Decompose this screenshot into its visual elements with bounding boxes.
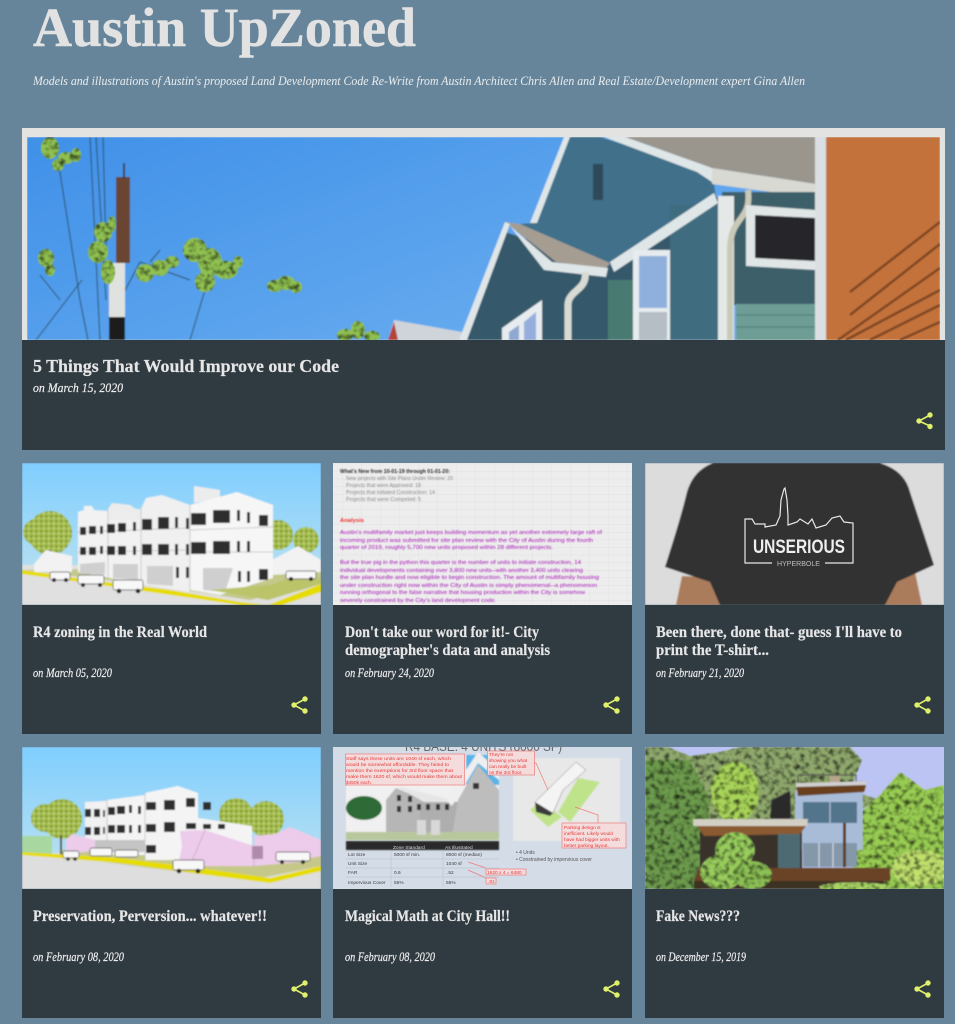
annotation box: staff note: make them 1620 sf, which would make them about (346, 774, 463, 780)
annotation box: parking: Parking design is (564, 825, 601, 831)
image: demographer spreadsheet: the site plan hurdle and now eligible to begin construction. The amount of multifamily housing (340, 575, 599, 581)
table text: 1040 sf (446, 861, 462, 867)
table text: Lot Size (348, 852, 366, 858)
annotation box: staff note (346, 754, 464, 786)
arms (676, 576, 720, 605)
upper overhang (796, 781, 866, 796)
white corner band (815, 137, 828, 340)
image: demographer spreadsheet: incoming product was submitted for site plan review with the City of Austin during the fourth (340, 538, 593, 544)
leaves (38, 137, 380, 341)
table text: 55% (446, 880, 456, 886)
table text: 0.6 (394, 870, 401, 876)
image: demographer spreadsheet: quarter of 2019, roughly 5,700 new units proposed within 28 different projects. (340, 545, 553, 551)
card text panel (22, 605, 321, 734)
annotation box: parking: have had bigger units with (564, 837, 620, 843)
image: annotated zoning slide (333, 738, 632, 889)
trees (22, 519, 34, 544)
gable vent (593, 164, 603, 200)
table text: .52 (447, 870, 454, 876)
deck (694, 868, 890, 881)
annotation box: third floor (488, 751, 534, 776)
site lot (530, 800, 562, 827)
post title: Preservation, Perversion... whatever!! (33, 908, 267, 925)
house upper block (795, 790, 863, 850)
garages (80, 562, 233, 592)
building (85, 799, 145, 850)
dark upper right wall (722, 192, 816, 305)
annotation box: staff note: $450k each. (346, 780, 372, 786)
right window (746, 205, 816, 270)
annotation box: staff note: mention the exemptions for 3rd floor space that (346, 768, 454, 774)
cars (63, 848, 310, 870)
image: pink house model (22, 747, 321, 889)
post date: on February 08, 2020 (345, 950, 436, 964)
featured text panel (22, 340, 945, 450)
isometric building (535, 762, 586, 813)
card text panel (22, 889, 321, 1018)
annotation: math (486, 869, 526, 885)
card text panel (333, 889, 632, 1018)
shirt logo: UNSERIOUS (753, 537, 845, 558)
image: R4 zoning model (22, 463, 321, 605)
image: demographer spreadsheet (333, 463, 632, 605)
orange wall (826, 137, 940, 340)
main gable trim (530, 137, 570, 223)
post title: print the T-shirt... (656, 642, 769, 659)
annotation box: third floor: showing you what (489, 758, 528, 764)
ground (22, 565, 321, 605)
plan panel (513, 758, 620, 841)
image: demographer spreadsheet: Analysis (340, 518, 364, 524)
upper windows (803, 802, 857, 823)
annotation box: staff note: Staff says these units are 1040 sf each, which (346, 756, 451, 762)
post title: Magical Math at City Hall!! (345, 908, 510, 925)
card text panel (333, 605, 632, 734)
downspout lower (568, 272, 585, 340)
image: demographer spreadsheet: severely constrained by the City's land development code. (340, 598, 496, 604)
downspout upper (730, 190, 748, 340)
siding green panel (608, 280, 634, 340)
panel: T-shirt card (645, 463, 944, 734)
table text: Impervious Cover (348, 880, 386, 886)
image: demographer spreadsheet: What's New from 10-01-19 through 01-01-20: (340, 469, 450, 475)
featured post date: on March 15, 2020 (33, 381, 124, 395)
upper gable wall (520, 137, 716, 267)
post title: Been there, done that- guess I'll have to (656, 624, 902, 641)
shirt logo: HYPERBOLE (777, 559, 820, 568)
image: demographer spreadsheet: under construction right now within the City of Austin is simply phenomenal--a phenomenon (340, 583, 597, 589)
porch (700, 827, 802, 871)
annotation box: parking (562, 823, 626, 849)
post title (656, 624, 902, 659)
utility pole (116, 177, 130, 263)
annotation: math: .81 (488, 879, 495, 885)
panel: magical math card (333, 738, 632, 1018)
table text: 5000 sf min. (394, 852, 420, 858)
table text: FAR (348, 870, 358, 876)
table header (346, 841, 499, 850)
windows (80, 510, 268, 582)
post date: on March 05, 2020 (33, 666, 113, 680)
annotation box: staff note: would be somewhat affordable. They failed to (346, 762, 449, 768)
annotation box: third floor: They're not (489, 752, 514, 758)
featured image frame (22, 128, 945, 340)
yellow curb and lawn (22, 570, 321, 605)
spiral stair (770, 791, 791, 820)
icon: share (915, 697, 930, 713)
image: demographer spreadsheet: Projects that initiated Construction: 14 (346, 490, 435, 496)
image: demographer spreadsheet: But the true pig in the python this quarter is the number of units to initiate construction, 14 (340, 560, 581, 566)
windows (85, 798, 225, 853)
fascia and gutter (710, 167, 816, 194)
icon: share (292, 697, 307, 713)
image: demographer spreadsheet: Austin's multifamily market just keeps building momentum as yet another extremely large raft of (340, 530, 602, 536)
annotation box: parking: better parking layout. (564, 843, 609, 849)
building (78, 506, 141, 584)
table text: Zone Standard (393, 845, 425, 851)
image: demographer spreadsheet: New projects with Site Plans Under Review: 20 (346, 476, 453, 482)
post date: on December 15, 2019 (656, 950, 747, 964)
icon: share (604, 981, 619, 997)
table text: 55% (394, 880, 404, 886)
card text panel (645, 605, 944, 734)
icon: share (915, 981, 930, 997)
blog subtitle: Models and illustrations of Austin's proposed Land Development Code Re-Write from Austin Architect Chris Allen and Real Estate/Development expert Gina Allen (32, 73, 805, 88)
post title (345, 624, 550, 659)
pink houses (66, 827, 321, 866)
card text panel (645, 889, 944, 1018)
tall window (633, 250, 670, 340)
image: modern house in trees (645, 747, 948, 892)
panel: featured post (22, 128, 945, 450)
image: demographer spreadsheet: individual developments containing over 3,800 new units--with another 3,400 units clearing (340, 568, 583, 574)
featured post title: 5 Things That Would Improve our Code (33, 356, 339, 376)
trees (31, 804, 59, 832)
icon: share (604, 697, 619, 713)
table text (348, 845, 482, 886)
bullet notes: • 4 Units (516, 850, 535, 856)
table text: As Illustrated (445, 845, 473, 851)
panel: R4 zoning card (22, 463, 321, 734)
lower wall (462, 197, 722, 340)
table text: 8000 sf (median) (446, 852, 482, 858)
table text: Unit Size (348, 861, 368, 867)
post title: Fake News??? (656, 908, 740, 925)
panel: city demographer card (333, 463, 632, 734)
image: demographer spreadsheet: running orthogonal to the false narrative that housing production within the City is somehow (340, 590, 586, 596)
post date: on February 21, 2020 (656, 666, 745, 680)
cars (50, 571, 316, 590)
small gable shingles (505, 222, 610, 270)
image: demographer spreadsheet: Projects that were Approved: 18 (346, 483, 421, 489)
post date: on February 08, 2020 (33, 950, 125, 964)
post title: Don't take our word for it!- City (345, 624, 539, 641)
diagonal trim (610, 193, 718, 272)
corner board (718, 196, 734, 340)
wires and branches (36, 137, 205, 340)
bullet notes (516, 850, 592, 863)
panel: preservation card (22, 747, 321, 1018)
panel: fake news card (645, 747, 948, 1018)
foreground foliage (645, 832, 948, 892)
post title: demographer's data and analysis (345, 642, 550, 659)
ground (22, 853, 321, 889)
yellow curb (22, 852, 321, 883)
shirt (665, 463, 934, 605)
annotation box: parking: inefficient. Likely would (564, 831, 613, 837)
annotation box: third floor: on the 3rd floor. (489, 770, 522, 776)
small gable window (502, 300, 542, 340)
background foliage (645, 747, 944, 889)
annotation box: third floor: can really be built (489, 764, 527, 770)
upper roof shingles (625, 137, 816, 184)
neighbor houses (34, 550, 72, 572)
bullet notes: • Constrained by impervious cover (516, 857, 592, 863)
lower windows (803, 843, 857, 867)
slide title: R4 BASE: 4 UNITS (8000 SF) (405, 738, 562, 754)
light siding (736, 304, 820, 340)
icon: share (292, 981, 307, 997)
icon: share (917, 413, 932, 429)
teal wall band (670, 205, 720, 340)
image: demographer spreadsheet: Projects that were Competed: 5 (346, 497, 421, 503)
rooftop rail (798, 775, 856, 784)
annotation: math: 1620 x 4 = 6480 (487, 870, 522, 876)
shirt logo (745, 488, 853, 568)
background roof (388, 320, 462, 340)
garages (85, 840, 145, 852)
post title: R4 zoning in the Real World (33, 624, 207, 641)
rendering (346, 755, 499, 840)
featured photo: houses and sky (27, 137, 940, 341)
image: Unserious T-shirt (645, 463, 944, 605)
post date: on February 24, 2020 (345, 666, 435, 680)
